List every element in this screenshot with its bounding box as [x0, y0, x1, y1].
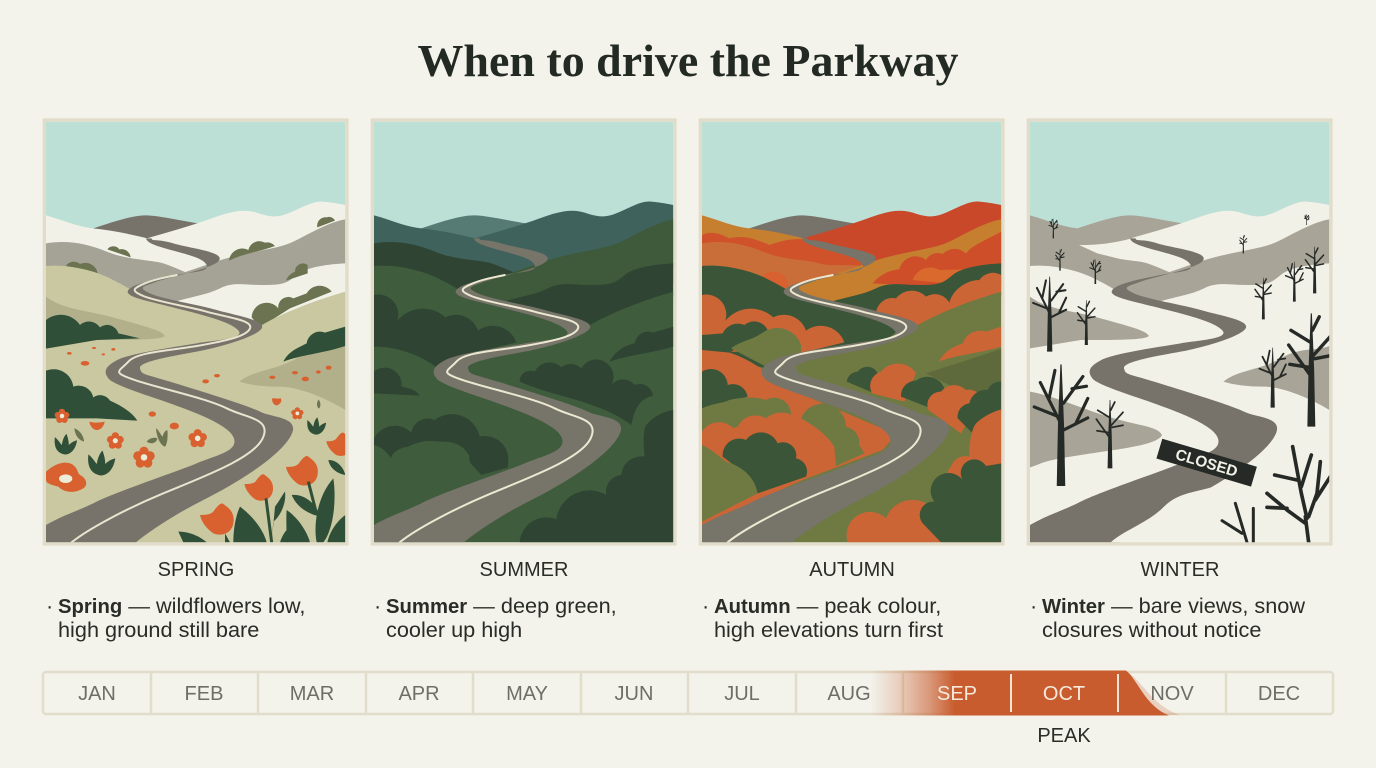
- month labels: JAN: [78, 683, 116, 705]
- closed road sign: [1156, 439, 1257, 487]
- note: spring: ·: [46, 593, 59, 618]
- green leaves and stems: [55, 417, 345, 542]
- note: winter: Winter: [1042, 596, 1105, 618]
- note: summer: cooler up high: [386, 617, 522, 642]
- note: winter: — bare views, snow: [1105, 593, 1305, 618]
- month labels: APR: [398, 683, 440, 705]
- bare trees: [1033, 214, 1333, 542]
- month labels: FEB: [185, 683, 223, 705]
- month labels: MAR: [290, 683, 334, 705]
- month labels: [78, 683, 1300, 705]
- note: spring: high ground still bare: [58, 617, 259, 642]
- note: autumn: high elevations turn first: [714, 617, 943, 642]
- dark green shrubs: [46, 315, 345, 421]
- forest canopy: [374, 295, 673, 542]
- panel: winter illustration: [1028, 120, 1333, 544]
- month labels: NOV: [1150, 683, 1194, 705]
- note: spring: — wildflowers low,: [122, 593, 305, 618]
- red foliage on the upper right slope: [873, 232, 1001, 287]
- peak season highlight: [1126, 671, 1180, 715]
- note: summer: Summer: [386, 596, 467, 618]
- peak label: PEAK: [1037, 725, 1091, 747]
- note: autumn: — peak colour,: [791, 593, 941, 618]
- note: autumn: Autumn: [714, 596, 791, 618]
- note: winter: closures without notice: [1042, 617, 1261, 642]
- month labels: JUL: [724, 683, 760, 705]
- title: When to drive the Parkway: [418, 35, 958, 86]
- season label: summer: SUMMER: [480, 559, 568, 581]
- month labels: MAY: [506, 683, 548, 705]
- note: summer: — deep green,: [467, 593, 617, 618]
- note: autumn: ·: [702, 593, 715, 618]
- month timeline: [43, 670, 1333, 716]
- note: spring: Spring: [58, 596, 122, 618]
- panel: summer illustration: [372, 120, 675, 544]
- closed road sign: CLOSED: [1173, 446, 1239, 481]
- note: summer: ·: [374, 593, 387, 618]
- note: winter: ·: [1030, 593, 1043, 618]
- season label: winter: WINTER: [1141, 559, 1219, 581]
- month labels: DEC: [1258, 683, 1300, 705]
- grey exposed hill patches: [1030, 297, 1329, 467]
- olive shrubs on the far hills: [66, 217, 335, 327]
- month labels: JUN: [615, 683, 653, 705]
- month labels: OCT: [1043, 683, 1085, 705]
- month labels: AUG: [827, 683, 871, 705]
- autumn tree canopy, left: [702, 295, 844, 353]
- month labels: SEP: [937, 683, 977, 705]
- wildflowers: [46, 347, 351, 535]
- season label: spring: SPRING: [158, 559, 234, 581]
- panel: autumn illustration: [700, 120, 1003, 544]
- snow drifting over the road: [1111, 487, 1212, 542]
- panel: spring illustration: [44, 120, 351, 544]
- season label: autumn: AUTUMN: [809, 559, 895, 581]
- autumn tree canopy, right: [939, 327, 1001, 362]
